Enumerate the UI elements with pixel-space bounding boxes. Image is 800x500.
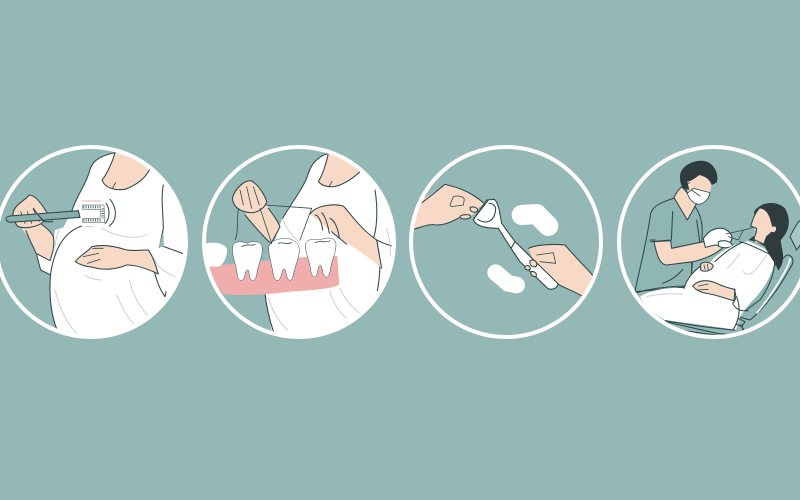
foam blobs <box>496 214 548 285</box>
tongue scraper tool <box>473 199 558 289</box>
hand on belly <box>75 246 158 274</box>
teeth <box>203 238 336 281</box>
left hand fingertips <box>460 207 478 219</box>
gums <box>209 256 339 295</box>
floss <box>235 205 312 243</box>
right hand <box>310 205 382 268</box>
neck and chest skin <box>102 153 149 190</box>
patient hair <box>748 203 789 271</box>
dentist head, hair and mask <box>680 161 717 204</box>
toothbrush <box>6 199 115 227</box>
dentist arm <box>654 228 733 265</box>
pregnant torso in white dress <box>264 154 392 335</box>
panel: brushing teeth <box>0 147 200 343</box>
patient body and blanket <box>637 241 775 337</box>
right hand <box>511 242 595 297</box>
panel: dentist visit <box>619 147 800 337</box>
ring <box>619 147 800 337</box>
dental chair <box>665 220 800 337</box>
left arm and hand holding toothbrush <box>13 195 54 261</box>
neck and chest skin <box>318 153 360 187</box>
illustration: four oral care steps during pregnancy <box>0 145 800 339</box>
patient hands <box>693 262 748 311</box>
ring <box>0 147 186 337</box>
patient face and neck <box>752 208 773 244</box>
left hand <box>232 181 280 243</box>
dentist scrubs <box>635 198 702 292</box>
ring <box>411 147 601 337</box>
panel: flossing teeth <box>203 147 407 343</box>
dental instrument <box>726 227 754 240</box>
dentist neck <box>674 187 697 220</box>
ring <box>204 147 394 337</box>
left hand <box>408 184 483 230</box>
panel: tongue scraper <box>408 147 601 337</box>
pregnant torso in white dress <box>36 152 184 335</box>
